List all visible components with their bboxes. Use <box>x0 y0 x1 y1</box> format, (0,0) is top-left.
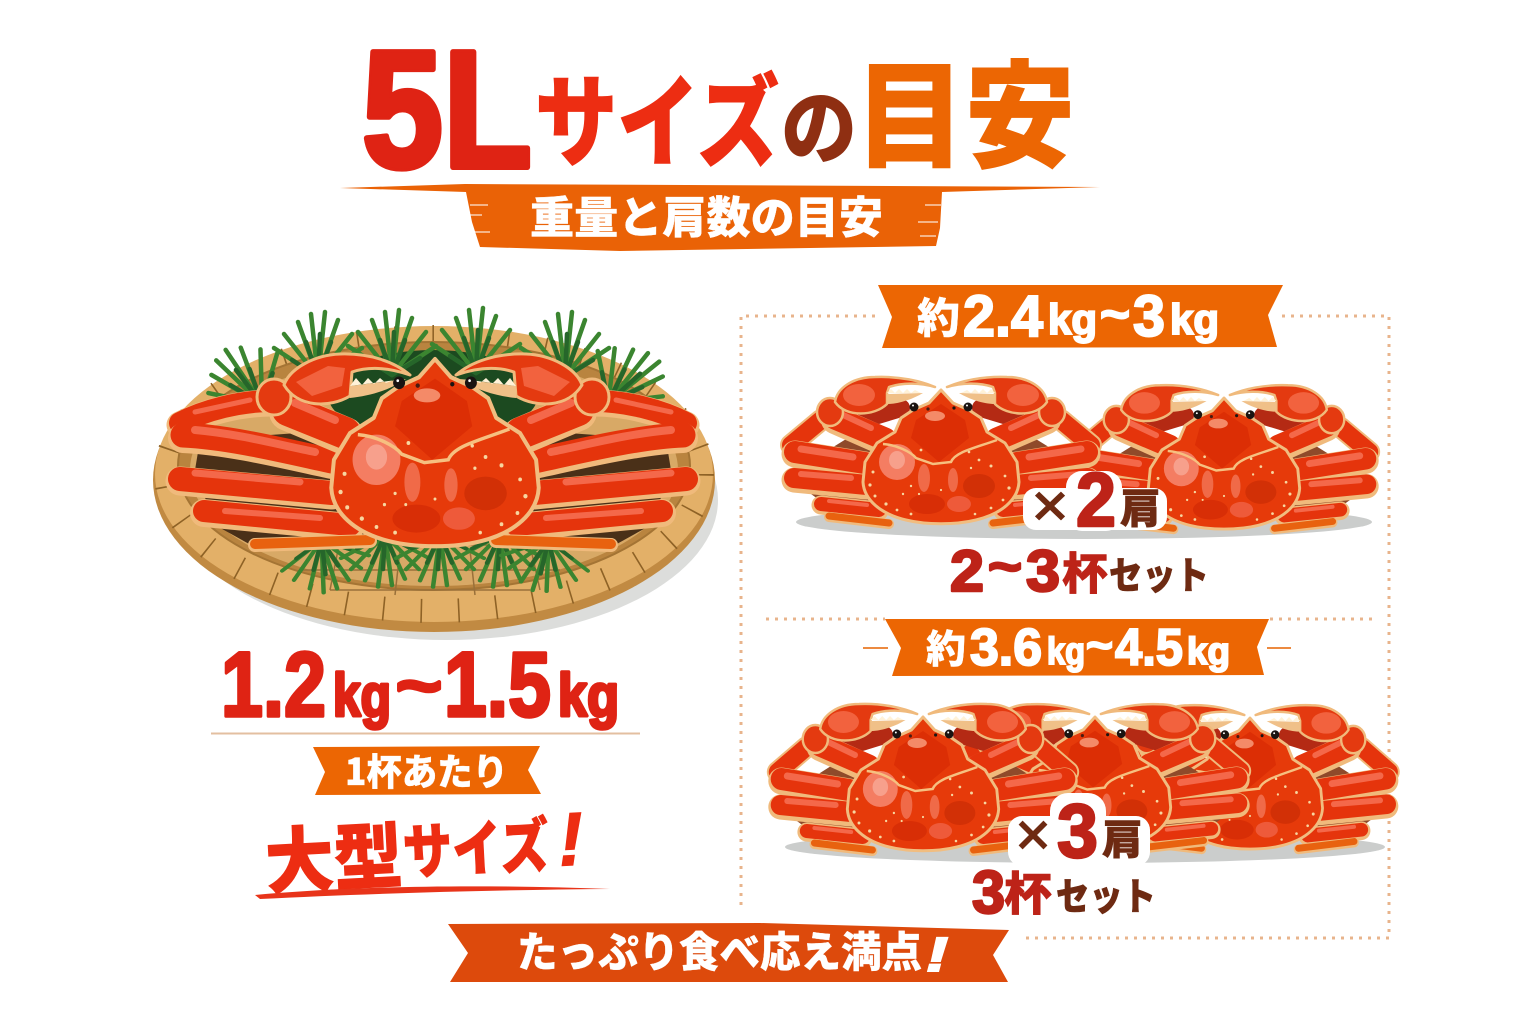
ribbon: 約3.6kg~4.5kg: 4.5 <box>1115 619 1183 677</box>
badge: ×3肩: × <box>1012 803 1054 864</box>
ribbon: closing message: ! <box>926 929 948 982</box>
ribbon: 約2.4kg~3kg: kg <box>1048 296 1097 344</box>
label: 2~3杯セット: ~ <box>988 538 1022 596</box>
label: 2~3杯セット: 杯 <box>1062 538 1108 602</box>
group: two crabs <box>791 377 1372 539</box>
ribbon: 約2.4kg~3kg: 約 <box>917 285 960 346</box>
ribbon: 約2.4kg~3kg: 2.4 <box>963 284 1043 349</box>
label: 3杯セット: セット <box>1056 866 1156 921</box>
callout: large size: 大型 <box>262 797 405 909</box>
callout: large size: ! <box>555 797 586 883</box>
weight: 1.2kg~1.5kg: ~ <box>396 648 442 722</box>
weight: 1.2kg~1.5kg: 1.2 <box>221 634 326 736</box>
weight: 1.2kg~1.5kg: kg <box>558 662 619 729</box>
ribbon: closing message: たっぷり食べ応え満点 <box>517 919 922 980</box>
ribbon: 約3.6kg~4.5kg: kg <box>1187 631 1230 673</box>
weight: 1.2kg~1.5kg: 1.5 <box>444 634 551 736</box>
title: 5L <box>362 17 532 203</box>
crab right <box>1110 705 1390 849</box>
badge: ×3肩 <box>1008 789 1150 874</box>
callout: large size: サイズ <box>401 798 551 892</box>
ribbon: 約2.4kg~3kg <box>878 284 1283 349</box>
panel: dotted frame <box>741 316 1389 938</box>
ribbon: 約3.6kg~4.5kg: ~ <box>1086 621 1113 670</box>
ribbon: 約3.6kg~4.5kg: 約 <box>926 619 966 675</box>
ribbon: 約3.6kg~4.5kg <box>863 619 1291 677</box>
badge: ×2肩 <box>1023 458 1167 543</box>
ribbon: 約3.6kg~4.5kg: kg <box>1047 631 1085 673</box>
label: 2~3杯セット: 2 <box>950 539 984 604</box>
shadow <box>796 505 1372 539</box>
label: 2~3杯セット <box>950 538 1209 604</box>
callout: large size <box>255 788 610 909</box>
title <box>362 17 1075 203</box>
crab left <box>778 704 1068 851</box>
badge: ×3肩: 3 <box>1057 789 1098 874</box>
badge: ×2肩: 肩 <box>1120 475 1161 535</box>
weight: 1.2kg~1.5kg <box>221 634 619 736</box>
crab middle <box>950 704 1240 848</box>
ribbon: per crab: 1杯あたり <box>345 742 508 796</box>
ribbon: 約2.4kg~3kg: ~ <box>1100 286 1130 342</box>
title: 目安 <box>855 24 1075 192</box>
crab left <box>791 377 1091 524</box>
group: three crabs <box>778 704 1390 863</box>
title: の <box>781 62 857 181</box>
basket shadow <box>174 360 718 640</box>
label: 3杯セット: 3 <box>972 859 1005 926</box>
badge: ×2肩: × <box>1028 474 1072 535</box>
brush banner: subtitle: 重量と肩数の目安 <box>530 182 883 246</box>
ribbon: 約2.4kg~3kg: kg <box>1170 296 1219 344</box>
label: 2~3杯セット: 3 <box>1026 539 1060 604</box>
divider under weight <box>211 732 640 734</box>
crab right <box>1078 385 1370 529</box>
shadow <box>785 831 1385 863</box>
bamboo basket <box>153 326 715 632</box>
pine garnish <box>187 308 685 599</box>
weight: 1.2kg~1.5kg: kg <box>333 662 391 729</box>
label: 2~3杯セット: セット <box>1109 545 1209 600</box>
title: サイズ <box>535 42 779 187</box>
illustration: crab on bamboo basket <box>153 308 718 640</box>
label: 3杯セット <box>972 858 1156 926</box>
badge: ×3肩: 肩 <box>1102 806 1143 866</box>
ribbon: 約3.6kg~4.5kg: 3.6 <box>970 619 1042 677</box>
label: 3杯セット: 杯 <box>1004 858 1052 924</box>
ribbon: 約2.4kg~3kg: 3 <box>1133 284 1165 349</box>
big crab <box>180 354 686 550</box>
brush banner: subtitle <box>340 182 1100 251</box>
brush underline <box>255 886 610 899</box>
badge: ×2肩: 2 <box>1076 458 1116 543</box>
